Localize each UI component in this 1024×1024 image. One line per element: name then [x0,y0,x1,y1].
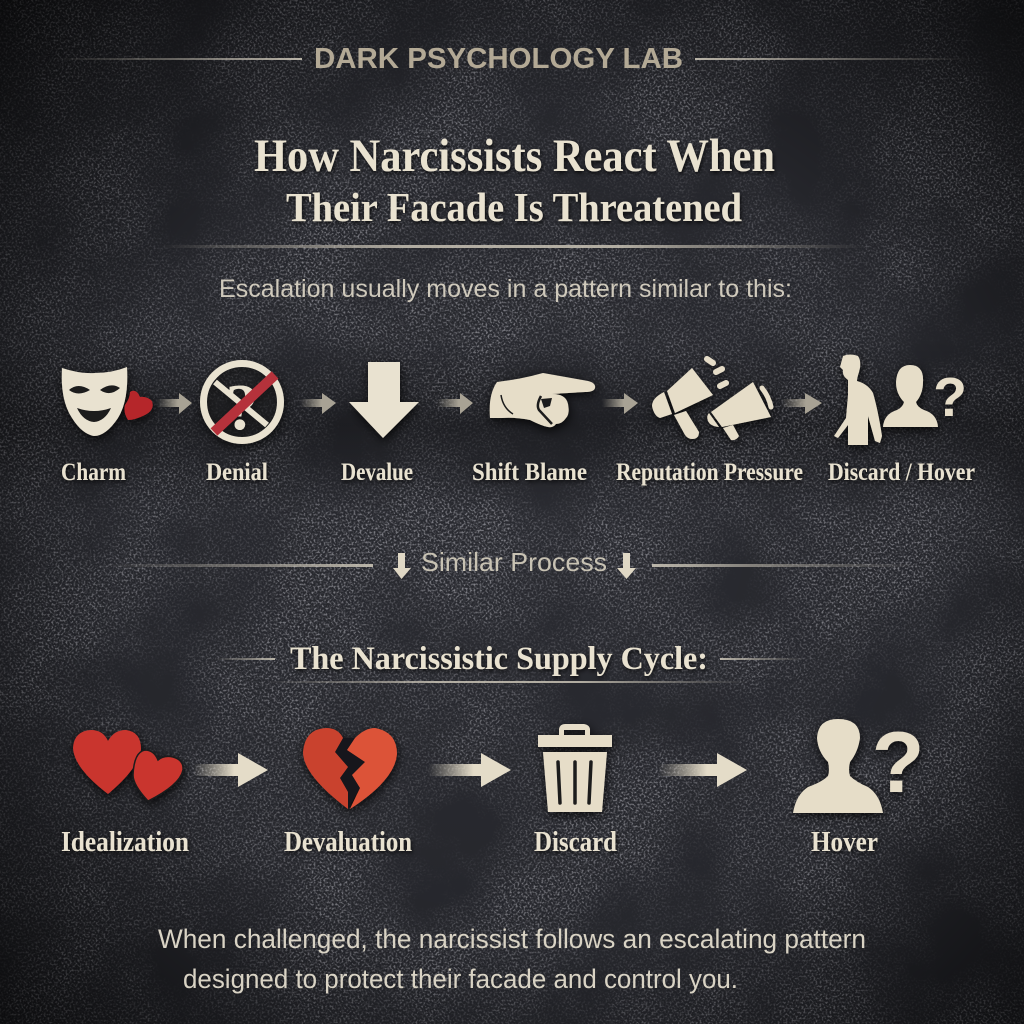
title rule [160,245,865,248]
step: Hover [793,715,924,858]
footer text [158,924,866,994]
section heading: The Narcissistic Supply Cycle: The Narcissistic Supply Cycle: [290,641,708,677]
step: Devaluation [284,728,412,858]
icon: silhouette with question mark [793,715,924,813]
arrow [602,393,638,414]
icon: down arrow right [617,553,636,579]
step: Charm: Charm [61,459,126,486]
step: Discard / Hover: Discard / Hover [828,459,975,486]
step: Charm [61,367,153,486]
step: Hover: Hover [811,827,878,858]
divider: Similar Process [105,547,920,579]
escalation flow [61,354,975,486]
icon: walking figure, silhouette and question mark: ? [933,366,967,428]
icon: two megaphones [652,359,771,440]
step: Denial [204,364,280,486]
step: Reputation Pressure: Reputation Pressure [616,459,803,486]
title: Their Facade Is Threatened [286,184,742,230]
step: Devaluation: Devaluation [284,827,412,858]
arrow [782,393,822,414]
footer text: When challenged, the narcissist follows an escalating pattern [158,924,866,954]
divider: Similar Process: Similar Process [421,547,607,577]
step: Shift Blame [472,373,595,486]
arrow [193,753,268,787]
step: Reputation Pressure [616,359,803,486]
icon: walking figure, silhouette and question mark [834,354,967,445]
icon: prohibited question: ? [226,371,258,444]
icon: down arrow [349,362,419,438]
step: Discard / Hover [828,354,975,486]
header: Dark Psychology Lab: DARK PSYCHOLOGY LAB [314,43,683,75]
title [254,130,775,230]
step: Idealization: Idealization [61,827,189,858]
step: Devalue: Devalue [341,459,413,486]
arrow [437,393,473,414]
arrow [157,393,192,414]
step: Idealization [61,730,189,858]
arrow [428,753,511,787]
icon: trash can [538,724,612,812]
step: Devalue [341,362,419,486]
icon: down arrow left [393,553,411,579]
icon: silhouette with question mark: ? [872,715,924,811]
arrow [300,393,336,414]
step: Shift Blame: Shift Blame [472,459,587,486]
supply cycle flow [61,715,924,858]
icon: pointing hand [490,373,595,427]
footer text: designed to protect their facade and control you. [183,964,738,994]
icon: broken heart [303,728,397,809]
step: Discard: Discard [534,827,617,858]
icon: mask with heart [62,367,153,436]
step: Discard [534,724,617,858]
title: How Narcissists React When [254,130,775,182]
icon: two hearts [73,730,183,801]
arrow [658,753,747,787]
subtitle: Escalation usually moves in a pattern similar to this: [219,275,792,303]
step: Denial: Denial [206,459,268,486]
